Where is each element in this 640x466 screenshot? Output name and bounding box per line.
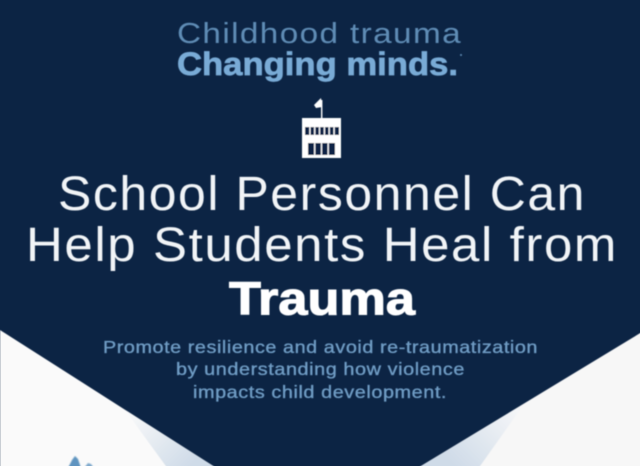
icon: school building with flag [302, 98, 341, 158]
subtitle line 2: by understanding how violence [176, 359, 465, 379]
subtitle line 3: impacts child development. [193, 382, 447, 402]
logo: Childhood trauma Changing minds [177, 18, 462, 82]
registered mark [460, 54, 462, 56]
subtitle text [103, 337, 538, 402]
right white panel [416, 332, 640, 466]
title line 1: School Personnel Can [58, 168, 586, 221]
main title [26, 168, 618, 324]
title line 3: Trauma: Trauma [229, 272, 415, 324]
icon: mountain peak [68, 456, 94, 466]
logo line: Changing minds: Changing minds. [177, 46, 458, 82]
left white panel [0, 330, 218, 466]
subtitle line 1: Promote resilience and avoid re-traumatization [103, 337, 538, 357]
logo line: Childhood trauma: Childhood trauma [177, 18, 462, 50]
title line 2: Help Students Heal from [26, 219, 618, 272]
